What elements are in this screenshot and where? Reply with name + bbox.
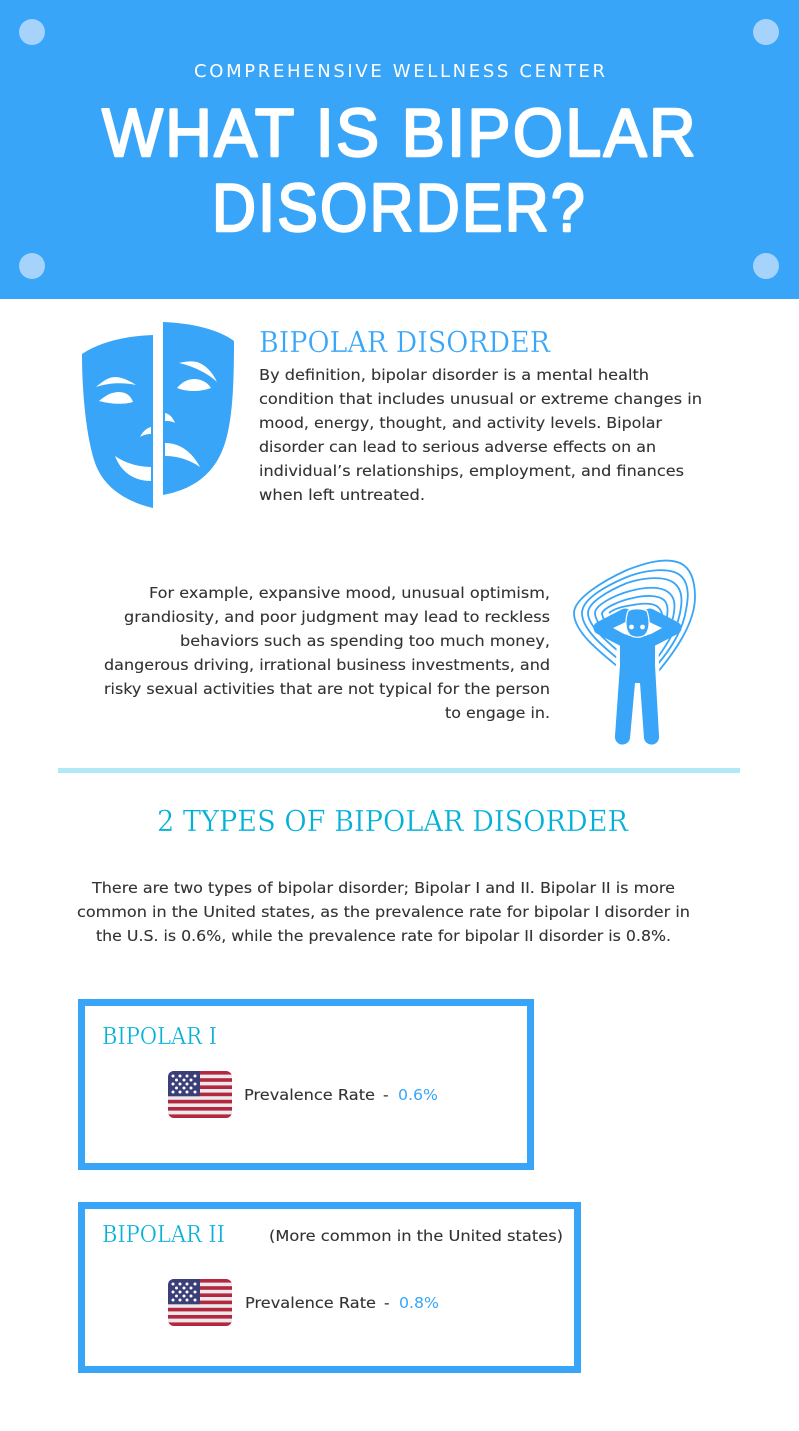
heading: 2 types: 2 TYPES OF BIPOLAR DISORDER — [157, 805, 629, 838]
definition paragraph: condition that includes unusual or extreme changes in — [259, 390, 702, 408]
title — [102, 95, 698, 246]
example paragraph: risky sexual activities that are not typical for the person — [104, 680, 550, 698]
definition paragraph: By definition, bipolar disorder is a mental health — [259, 366, 649, 384]
prevalence rate: Prevalence Rate — [245, 1294, 376, 1312]
panel heading: bipolar I: BIPOLAR I — [102, 1024, 217, 1050]
definition paragraph: individual’s relationships, employment, and finances — [259, 462, 684, 480]
example paragraph: For example, expansive mood, unusual optimism, — [149, 584, 550, 602]
prevalence rate — [244, 1086, 438, 1104]
prevalence rate: 0.6% — [398, 1086, 438, 1104]
types paragraph: the U.S. is 0.6%, while the prevalence rate for bipolar II disorder is 0.8%. — [96, 927, 671, 945]
example paragraph — [104, 584, 550, 722]
note: more common: (More common in the United states) — [269, 1227, 563, 1245]
heading: bipolar disorder: BIPOLAR DISORDER — [259, 326, 551, 359]
icon: stressed person with rings — [574, 561, 695, 745]
example paragraph: dangerous driving, irrational business investments, and — [104, 656, 550, 674]
example paragraph: to engage in. — [445, 704, 550, 722]
icon: US flag — [168, 1279, 232, 1326]
panel heading: bipolar II: BIPOLAR II — [102, 1222, 225, 1248]
definition paragraph: mood, energy, thought, and activity levels. Bipolar — [259, 414, 663, 432]
definition paragraph: when left untreated. — [259, 486, 425, 504]
prevalence rate — [245, 1294, 439, 1312]
prevalence rate: 0.8% — [399, 1294, 439, 1312]
definition paragraph — [259, 366, 702, 504]
title: WHAT IS BIPOLAR — [102, 95, 698, 171]
organisation name: COMPREHENSIVE WELLNESS CENTER — [194, 61, 605, 82]
panel: bipolar I — [82, 1002, 530, 1166]
definition paragraph: disorder can lead to serious adverse effects on an — [259, 438, 656, 456]
prevalence rate: - — [383, 1086, 389, 1104]
example paragraph: behaviors such as spending too much money, — [180, 632, 550, 650]
panel: bipolar II — [82, 1206, 578, 1370]
prevalence rate: - — [384, 1294, 390, 1312]
divider — [58, 768, 740, 773]
example paragraph: grandiosity, and poor judgment may lead to reckless — [124, 608, 550, 626]
icon: comedy and tragedy mask — [82, 322, 234, 508]
prevalence rate: Prevalence Rate — [244, 1086, 375, 1104]
icon: US flag — [168, 1071, 232, 1118]
title: DISORDER? — [212, 170, 587, 246]
types paragraph: There are two types of bipolar disorder; Bipolar I and II. Bipolar II is more — [91, 879, 675, 897]
types paragraph: common in the United states, as the prevalence rate for bipolar I disorder in — [77, 903, 690, 921]
types paragraph — [77, 879, 690, 945]
header banner — [0, 0, 799, 299]
